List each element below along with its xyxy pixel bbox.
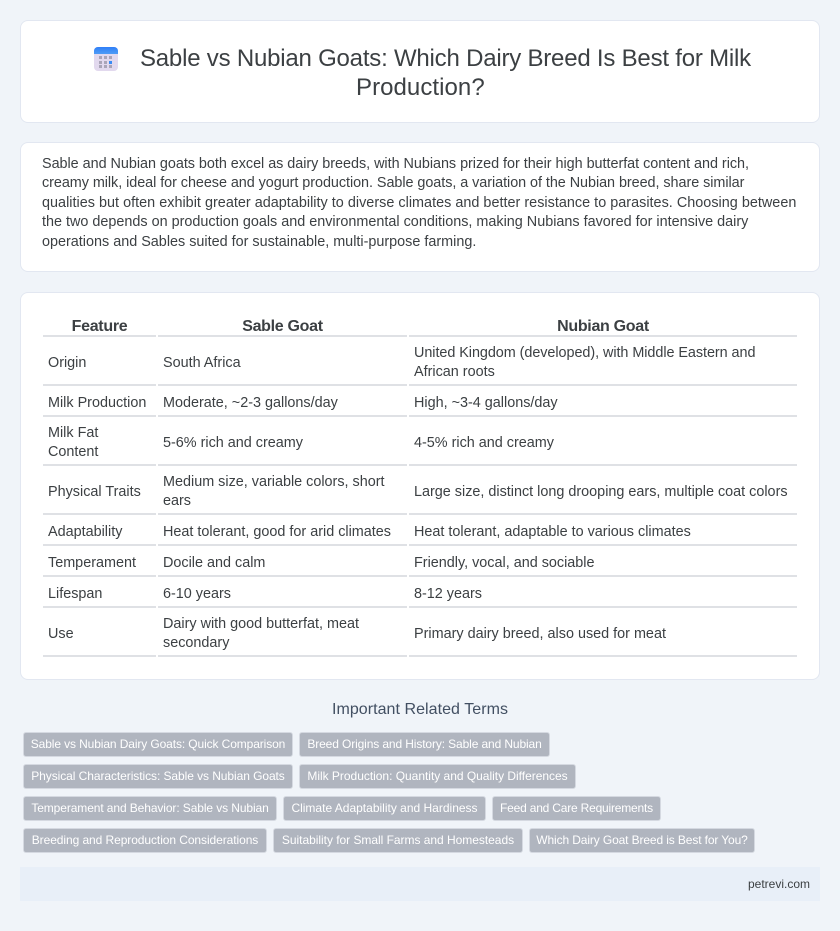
- comparison table: Docile and calm: [163, 555, 265, 571]
- comparison table: High, ~3-4 gallons/day: [414, 395, 558, 411]
- intro text: qualities but often exhibit greater adaptability to diverse climates and better resistance to parasites. Choosing between: [42, 195, 796, 211]
- comparison table: Use: [48, 626, 74, 642]
- heading: related terms: Important Related Terms: [332, 701, 508, 718]
- intro text: operations and Sables suited for sustainable, multi-purpose farming.: [42, 234, 476, 250]
- comparison table: Moderate, ~2-3 gallons/day: [163, 395, 338, 411]
- tag list: Sable vs Nubian Dairy Goats: Quick Comparison: [31, 737, 285, 751]
- icon: calendar: [94, 47, 118, 71]
- comparison table: South Africa: [163, 355, 241, 371]
- comparison table: Friendly, vocal, and sociable: [414, 555, 595, 571]
- comparison table: Heat tolerant, adaptable to various climates: [414, 524, 691, 540]
- intro text: creamy milk, ideal for cheese and yogurt production. Sable goats, a variation of the Nubian breed, share similar: [42, 175, 744, 191]
- comparison table: 8-12 years: [414, 586, 482, 602]
- header card: [20, 20, 820, 123]
- tag list: Milk Production: Quantity and Quality Differences: [307, 769, 568, 783]
- tag list: Breed Origins and History: Sable and Nubian: [307, 737, 542, 751]
- intro text: [42, 156, 796, 250]
- comparison table: United Kingdom (developed), with Middle Eastern and: [414, 345, 755, 361]
- comparison table: Physical Traits: [48, 484, 141, 500]
- tag list: Climate Adaptability and Hardiness: [291, 801, 478, 815]
- panel: comparison table: [20, 292, 820, 680]
- comparison table: Feature: [72, 318, 127, 335]
- comparison table: Milk Fat: [48, 425, 98, 441]
- tag list: Temperament and Behavior: Sable vs Nubian: [31, 801, 269, 815]
- comparison table: secondary: [163, 635, 229, 651]
- comparison table: [43, 318, 797, 657]
- footer link: petrevi.com: [748, 877, 810, 891]
- comparison table: Temperament: [48, 555, 136, 571]
- comparison table: 4-5% rich and creamy: [414, 435, 554, 451]
- tag list: Feed and Care Requirements: [500, 801, 653, 815]
- tag list: Breeding and Reproduction Considerations: [32, 833, 258, 847]
- tag list: Physical Characteristics: Sable vs Nubian Goats: [31, 769, 285, 783]
- tag list: Which Dairy Goat Breed is Best for You?: [536, 833, 748, 847]
- title: [140, 45, 752, 101]
- comparison table: 5-6% rich and creamy: [163, 435, 303, 451]
- panel: intro: [20, 142, 820, 272]
- comparison table: Content: [48, 444, 98, 460]
- footer: [20, 867, 820, 901]
- comparison table: ears: [163, 493, 191, 509]
- comparison table: Adaptability: [48, 524, 122, 540]
- comparison table: Heat tolerant, good for arid climates: [163, 524, 391, 540]
- comparison table: 6-10 years: [163, 586, 231, 602]
- comparison table: Milk Production: [48, 395, 146, 411]
- intro text: Sable and Nubian goats both excel as dairy breeds, with Nubians prized for their high butterfat content and rich,: [42, 156, 749, 172]
- comparison table: Sable Goat: [242, 318, 323, 335]
- comparison table: African roots: [414, 364, 495, 380]
- comparison table: Primary dairy breed, also used for meat: [414, 626, 666, 642]
- title: Sable vs Nubian Goats: Which Dairy Breed Is Best for Milk: [140, 45, 751, 72]
- tag list: [23, 732, 755, 853]
- title: Production?: [356, 74, 485, 101]
- comparison table: Dairy with good butterfat, meat: [163, 616, 359, 632]
- comparison table: Origin: [48, 355, 86, 371]
- tag list: Suitability for Small Farms and Homesteads: [282, 833, 514, 847]
- intro text: the two depends on production goals and environmental conditions, making Nubians favored for intensive dairy: [42, 214, 748, 230]
- comparison table: Medium size, variable colors, short: [163, 474, 385, 490]
- comparison table: Large size, distinct long drooping ears, multiple coat colors: [414, 484, 788, 500]
- comparison table: Lifespan: [48, 586, 102, 602]
- comparison table: Nubian Goat: [557, 318, 649, 335]
